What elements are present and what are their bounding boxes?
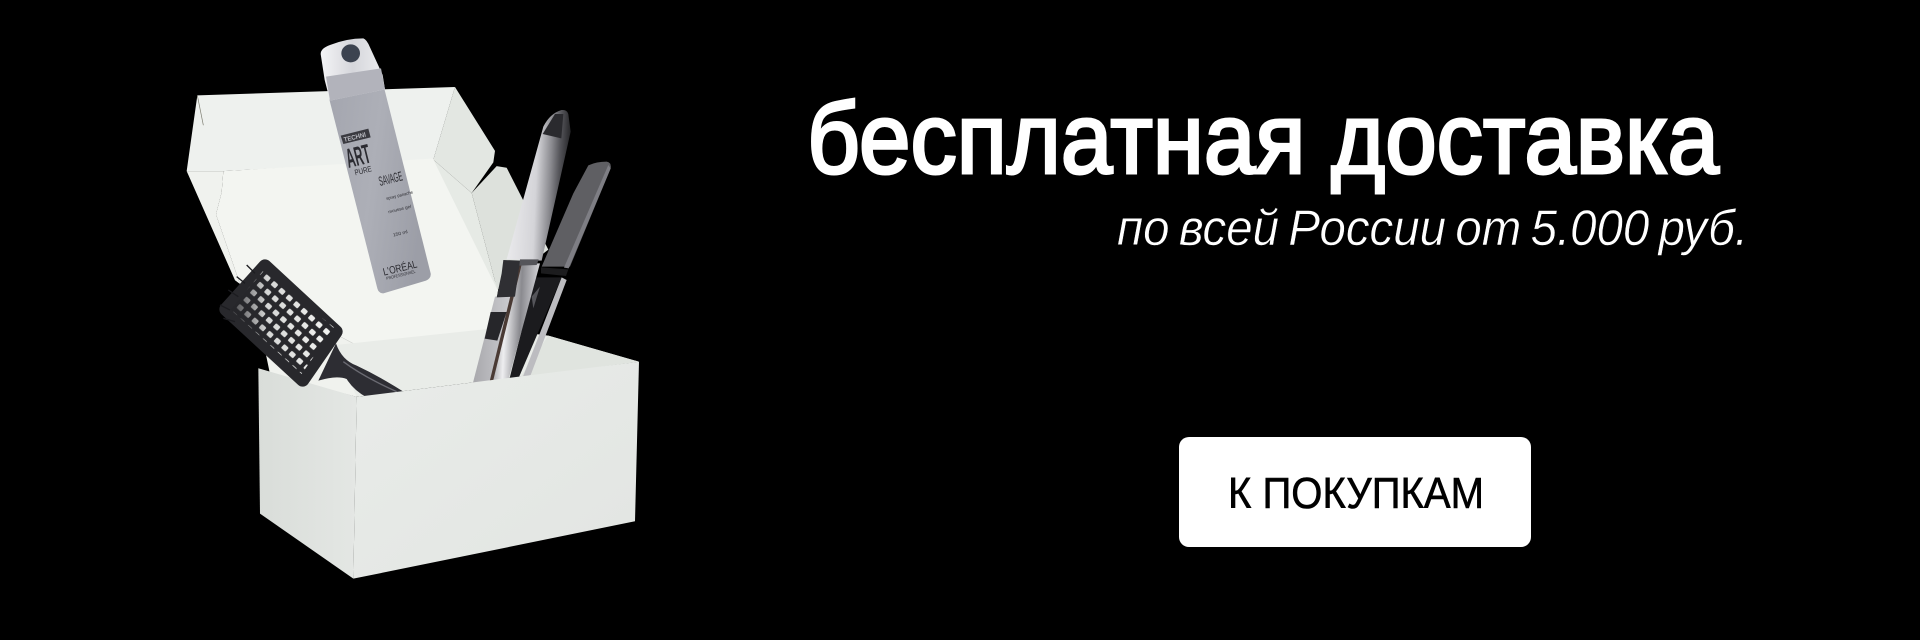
box interior: [333, 328, 639, 397]
can label text: 150 ml: [392, 229, 408, 238]
heading: бесплатная доставка: [807, 83, 1719, 195]
can cap: [321, 38, 385, 101]
hair straightener: silver: [473, 110, 571, 384]
can label text: ART: [343, 138, 374, 174]
can label text: TECHNI: [343, 132, 367, 144]
brush handle: [318, 343, 405, 397]
button: К ПОКУПКАМ: [1228, 469, 1484, 518]
can label text: L'ORÉAL: [382, 258, 418, 279]
hair spray can: [321, 38, 431, 293]
box front: [353, 362, 639, 579]
can label text: PURE: [354, 164, 373, 177]
hair brush: [220, 265, 405, 397]
hair straightener: dark plate: [509, 162, 611, 379]
box lid: [187, 87, 548, 397]
illustration: open box with products: [187, 38, 639, 579]
can label text: spray panache: [386, 189, 414, 201]
can label text: SAVAGE: [377, 169, 404, 189]
subheading: по всей России от 5.000 руб.: [1117, 200, 1748, 256]
can label text: PROFESSIONNEL: [386, 269, 416, 281]
button: [1179, 437, 1531, 547]
brush openings: [231, 271, 334, 374]
brush head: [226, 266, 336, 380]
can body: [329, 87, 431, 293]
can nozzle: [341, 44, 360, 62]
can label text: mousse gel: [388, 204, 412, 214]
can label text: [341, 129, 418, 281]
box left side: [258, 368, 357, 579]
brush bristles: [220, 265, 255, 322]
